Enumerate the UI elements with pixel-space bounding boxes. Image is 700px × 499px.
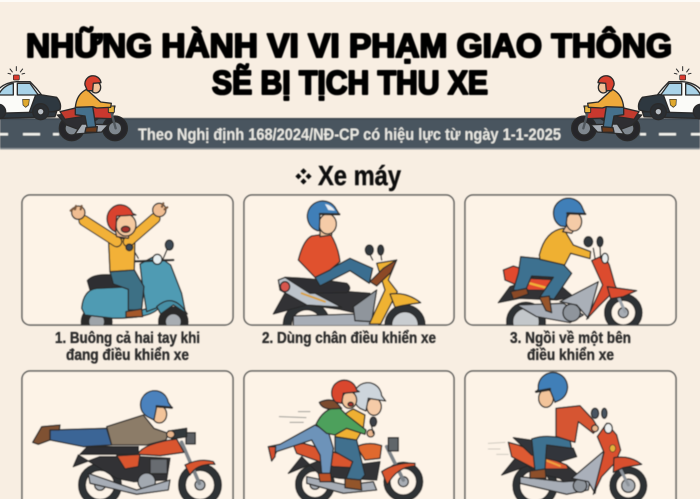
caption 3: điều khiển xe (527, 347, 614, 364)
title: NHỮNG HÀNH VI VI PHẠM GIAO THÔNG (26, 26, 672, 64)
caption 1 (55, 330, 200, 364)
caption 3: 3. Ngồi về một bên (510, 330, 631, 347)
caption 2: 2. Dùng chân điều khiển xe (262, 330, 436, 347)
panel 5: two riders with leg out (244, 371, 454, 499)
section heading: xe máy: ❖ (295, 168, 312, 187)
caption 1: 1. Buông cả hai tay khi (55, 330, 200, 347)
section heading: xe máy: Xe máy (318, 160, 401, 191)
caption 1: đang điều khiển xe (66, 347, 189, 364)
title (26, 26, 672, 101)
road banner: Theo Nghị định 168/2024/NĐ-CP có hiệu lực từ ngày 1-1-2025 (138, 126, 561, 144)
panel 6: rider looking back (465, 371, 676, 499)
panel 2: steering with feet (242, 194, 456, 326)
road banner (0, 118, 700, 150)
panel 4: lying on the bike (22, 371, 233, 499)
section heading: xe máy (295, 160, 401, 191)
panel 3: sitting sideways (465, 195, 676, 341)
icon: police car and rider, left (0, 67, 127, 141)
title: SẼ BỊ TỊCH THU XE (212, 64, 488, 101)
caption 3 (510, 330, 631, 364)
icon: police car and rider, right (572, 67, 700, 141)
panel 1: releasing both hands (22, 195, 233, 337)
